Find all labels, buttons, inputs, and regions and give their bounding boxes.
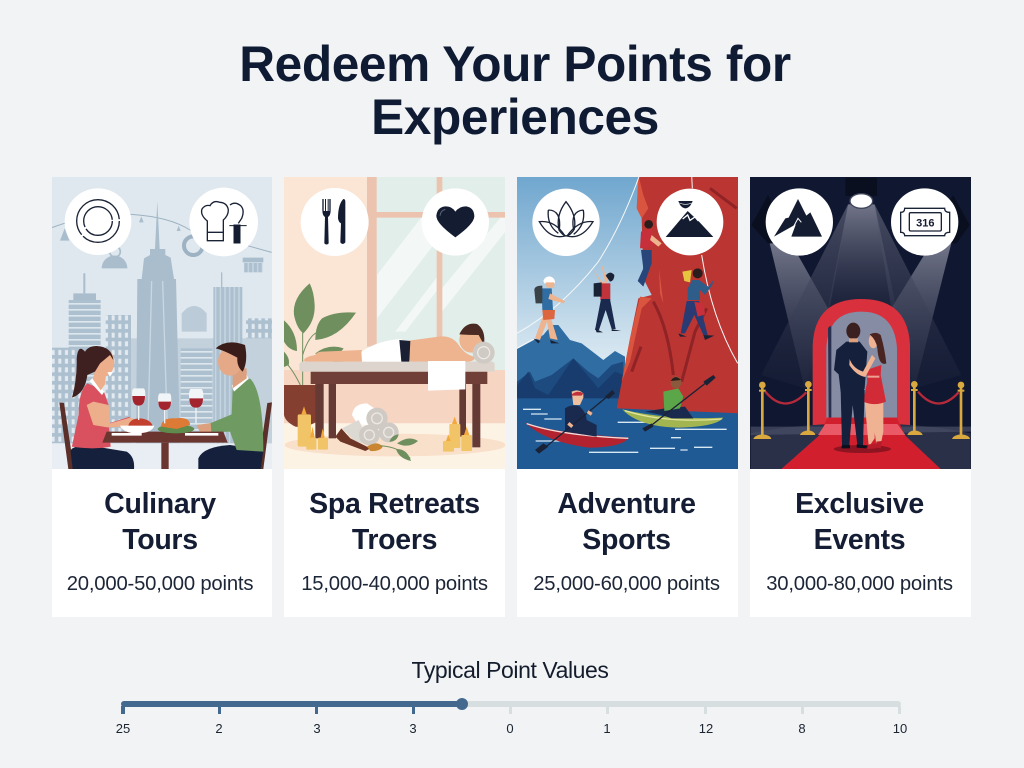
couple xyxy=(834,323,886,449)
title xyxy=(239,36,791,145)
card heading: Culinary xyxy=(104,488,216,520)
slider scale labels: 12 xyxy=(699,721,713,736)
card heading: Spa Retreats xyxy=(309,488,480,520)
arch xyxy=(813,299,910,425)
card heading xyxy=(309,488,480,556)
points range: 20,000-50,000 points xyxy=(67,573,253,595)
panel: spa retreats xyxy=(284,177,505,617)
chairs xyxy=(59,402,117,469)
water highlights xyxy=(523,409,727,452)
massage table xyxy=(299,362,495,447)
icon: lotus xyxy=(532,189,600,256)
table and food xyxy=(102,432,228,443)
panel: exclusive events xyxy=(750,177,971,617)
icon: fork and knife xyxy=(301,188,369,256)
icon: heart xyxy=(422,188,489,256)
panel: adventure sports xyxy=(517,177,738,617)
points range: 25,000-60,000 points xyxy=(533,573,720,595)
card heading: Events xyxy=(814,524,905,556)
title: Redeem Your Points for xyxy=(239,36,791,92)
illustration: dining couple before a city skyline xyxy=(52,177,272,469)
card heading xyxy=(104,488,216,556)
red carpet xyxy=(781,418,941,469)
icon: mountain xyxy=(657,189,723,255)
icon: event ticket: 316 xyxy=(916,217,935,229)
points range: 30,000-80,000 points xyxy=(766,573,953,595)
card heading: Tours xyxy=(122,524,198,556)
slider scale labels xyxy=(116,721,907,736)
icon: chef hat xyxy=(189,188,258,256)
illustration: massage table in a spa room xyxy=(284,177,505,469)
floor and rope stands xyxy=(751,423,971,469)
wine glasses xyxy=(139,405,196,423)
slider: typical point values xyxy=(121,698,901,714)
slider scale labels: 10 xyxy=(893,721,907,736)
illustration: couple on the red carpet xyxy=(750,177,971,469)
slider scale labels: 2 xyxy=(215,721,223,736)
candles xyxy=(298,406,472,452)
points range: 15,000-40,000 points xyxy=(301,573,488,595)
card heading: Adventure xyxy=(557,488,696,520)
woman xyxy=(71,446,134,469)
illustration: climbers, hikers and kayakers xyxy=(517,177,738,469)
green kayak xyxy=(622,375,723,432)
card heading xyxy=(795,488,924,556)
card heading: Sports xyxy=(582,524,671,556)
card heading xyxy=(557,488,696,556)
icon: event ticket xyxy=(891,188,958,256)
climbers on rock xyxy=(638,220,714,340)
chart heading: Typical Point Values xyxy=(411,657,608,683)
red kayak xyxy=(525,390,629,454)
slider scale labels: 8 xyxy=(798,721,806,736)
title: Experiences xyxy=(371,89,659,145)
person lying face down xyxy=(304,324,495,391)
rolled towels xyxy=(335,403,418,461)
icon: plate xyxy=(65,188,131,255)
hikers on rope xyxy=(533,261,621,343)
card heading: Troers xyxy=(352,524,437,556)
card heading: Exclusive xyxy=(795,488,924,520)
slider scale labels: 3 xyxy=(313,721,321,736)
icon: mountain peaks xyxy=(766,188,833,256)
plant xyxy=(284,283,356,427)
slider scale labels: 3 xyxy=(409,721,417,736)
panel: culinary tours xyxy=(52,177,272,617)
slider scale labels: 0 xyxy=(506,721,514,736)
slider scale labels: 1 xyxy=(603,721,611,736)
slider scale labels: 25 xyxy=(116,721,130,736)
man xyxy=(198,445,263,469)
